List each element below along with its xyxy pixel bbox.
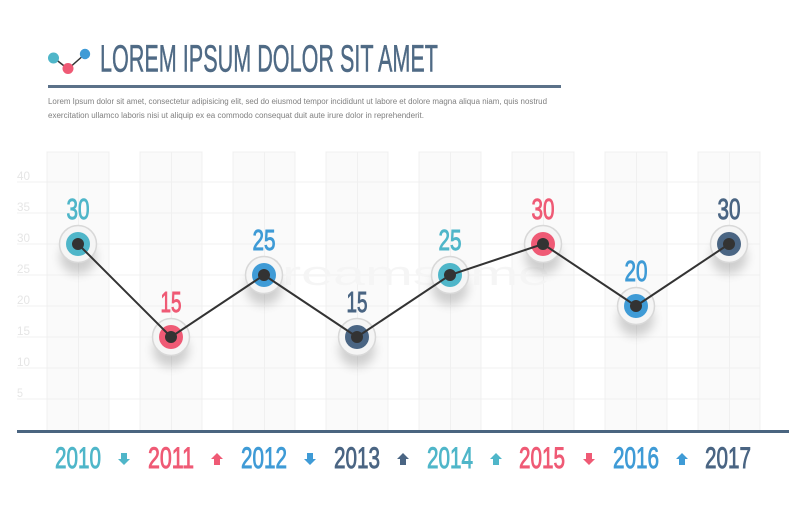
title underline xyxy=(48,85,561,88)
intro text: Lorem Ipsum dolor sit amet, consectetur adipisicing elit, sed do eiusmod tempor incididunt ut labore et dolore magna aliqua niam, quis nostrud xyxy=(48,97,547,106)
year labels: 2017 xyxy=(705,442,751,475)
title: LOREM IPSUM DOLOR SIT AMET xyxy=(100,38,438,80)
value labels: 25 xyxy=(252,225,276,257)
y axis labels: 40 xyxy=(17,169,30,183)
intro text xyxy=(48,97,547,120)
y axis labels: 20 xyxy=(17,293,30,307)
year labels: 2014 xyxy=(427,442,473,475)
year labels: 2011 xyxy=(148,442,194,475)
marker rings xyxy=(60,226,748,356)
year labels: 2012 xyxy=(241,442,287,475)
data line xyxy=(78,244,729,337)
chart: column bands xyxy=(17,152,760,431)
marker colour discs xyxy=(66,232,741,349)
value labels: 30 xyxy=(532,194,554,226)
y axis labels: 10 xyxy=(17,355,30,369)
x axis line xyxy=(17,430,789,433)
intro text: exercitation ullamco laboris nisi ut aliquip ex ea commodo consequat duit aute irure dolor in reprehenderit. xyxy=(48,111,424,120)
y axis labels: 15 xyxy=(17,324,30,338)
value labels xyxy=(66,194,740,319)
y axis labels: 35 xyxy=(17,200,30,214)
value labels: 20 xyxy=(624,256,648,288)
y axis labels: 30 xyxy=(17,231,30,245)
watermark: dreamstime xyxy=(250,255,550,293)
year labels: 2015 xyxy=(519,442,565,475)
year labels: 2010 xyxy=(55,442,101,475)
y axis labels: 5 xyxy=(17,386,23,400)
value labels: 15 xyxy=(160,287,182,319)
year labels: 2013 xyxy=(334,442,380,475)
y axis labels xyxy=(17,169,30,400)
y axis labels: 25 xyxy=(17,262,30,276)
marker centre dots xyxy=(72,238,735,343)
year labels xyxy=(55,442,751,475)
value labels: 25 xyxy=(438,225,462,257)
value labels: 30 xyxy=(66,194,90,226)
year labels: 2016 xyxy=(613,442,659,475)
icon: mini line chart xyxy=(48,49,90,74)
value labels: 30 xyxy=(718,194,740,226)
value labels: 15 xyxy=(346,287,368,319)
marker shadows xyxy=(60,240,747,367)
trend arrows xyxy=(118,453,688,465)
